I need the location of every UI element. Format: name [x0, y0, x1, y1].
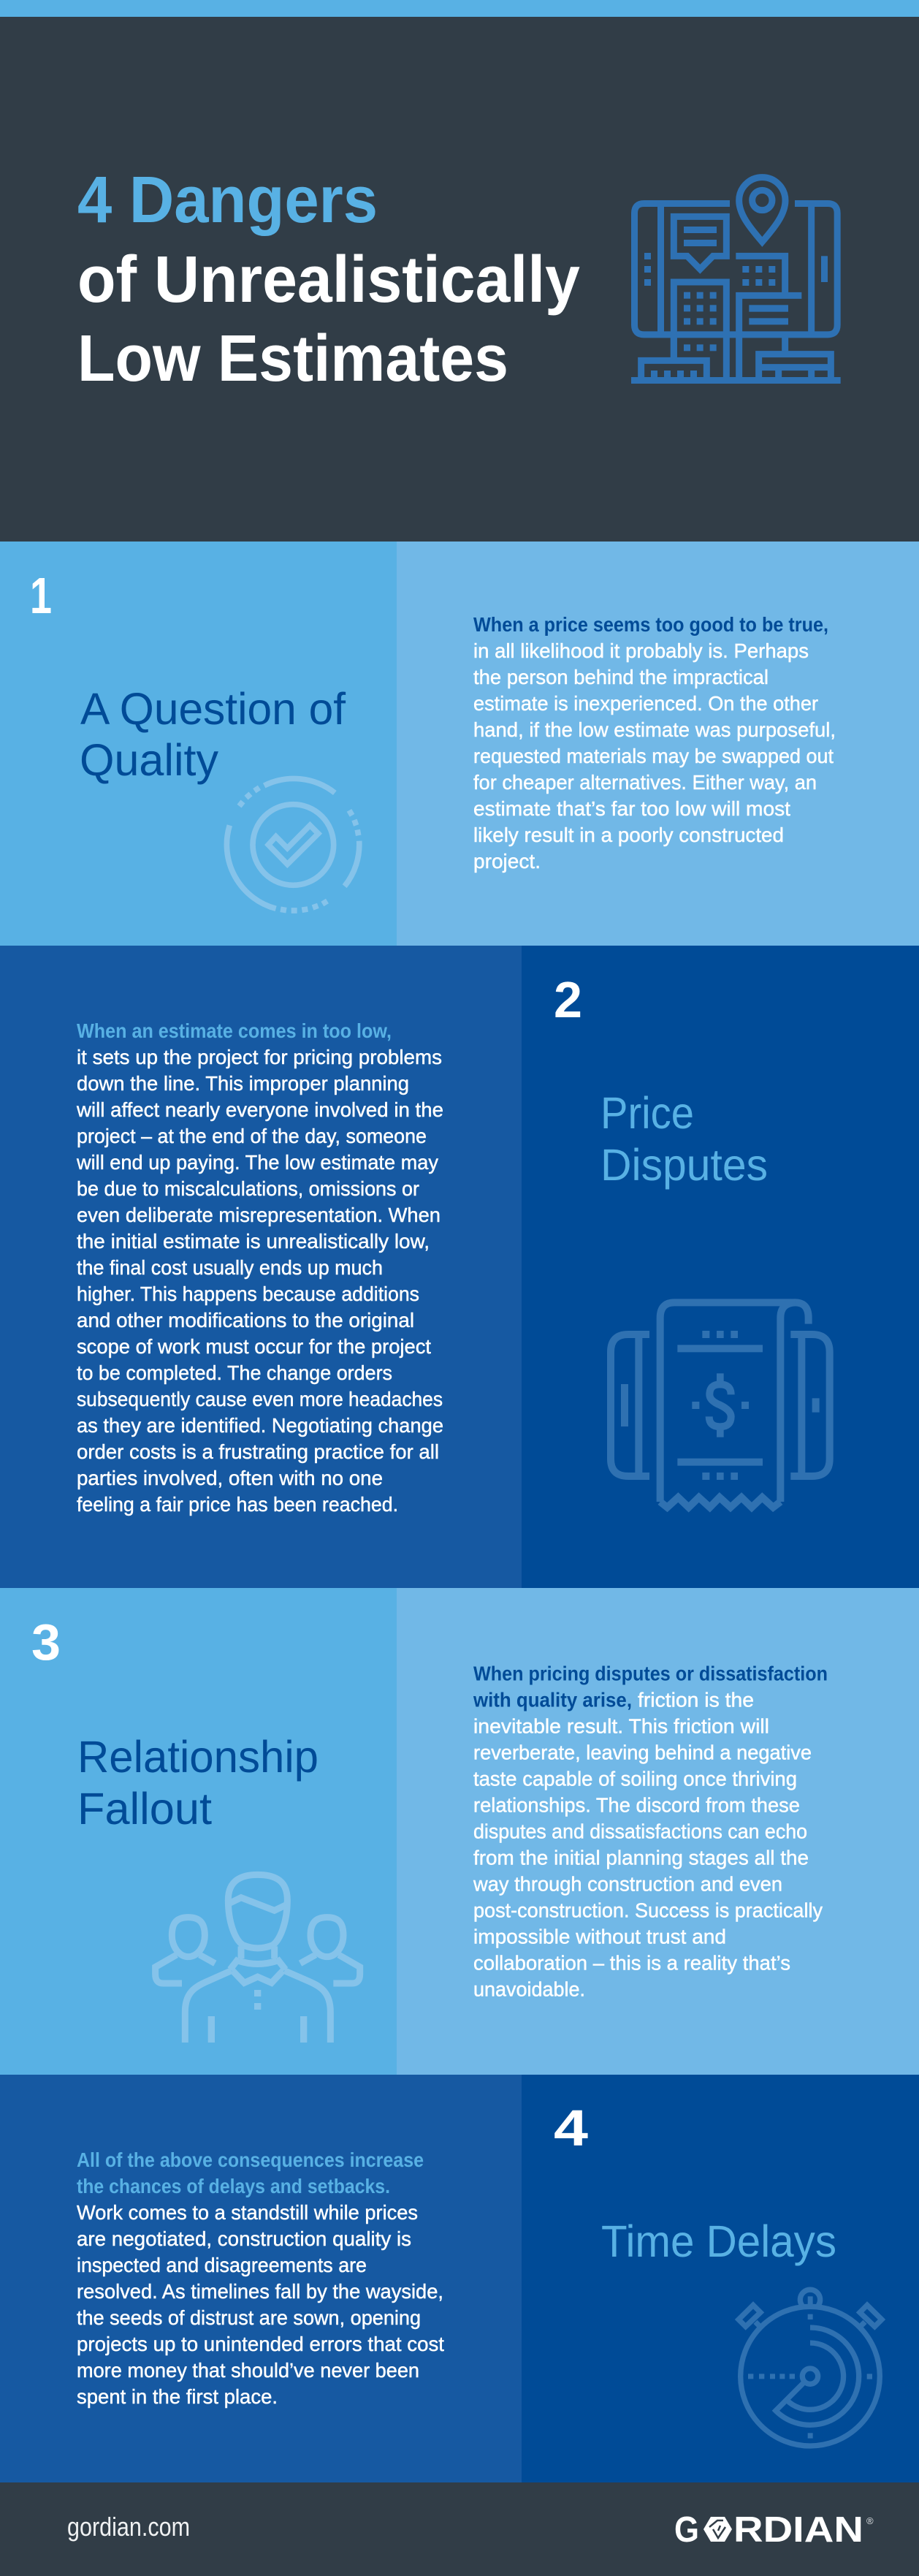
heading: Price Disputes: Price: [600, 1088, 694, 1138]
text block: section 4 body: [77, 2148, 444, 2408]
text block: section 3 body: inevitable result. This friction will: [473, 1714, 769, 1738]
heading: Relationship Fallout: Fallout: [77, 1784, 212, 1834]
text block: section 3 body: disputes and dissatisfactions can echo: [473, 1820, 807, 1843]
icon: team of three people: [156, 1874, 360, 2043]
text block: section 3 body: [473, 1662, 828, 2001]
text block: section 1 body: project.: [473, 850, 541, 873]
text block: section 1 body: When a price seems too good to be true,: [473, 613, 828, 636]
heading: Time Delays: Time Delays: [601, 2216, 836, 2266]
heading: A Question of Quality: [80, 684, 346, 785]
text block: section 1 body: likely result in a poorly constructed: [473, 824, 784, 846]
text block: section 4 body: inspected and disagreements are: [77, 2254, 367, 2276]
heading: A Question of Quality: Quality: [80, 735, 218, 785]
text block: section 4 body: the seeds of distrust are sown, opening: [77, 2306, 421, 2329]
top accent bar: [0, 0, 919, 17]
text block: section 1 body: for cheaper alternatives. Either way, an: [473, 771, 817, 794]
text block: section 1 body: in all likelihood it probably is. Perhaps: [473, 639, 809, 662]
text block: section 3 body: from the initial planning stages all the: [473, 1846, 809, 1869]
icon: stopwatch: [739, 2290, 882, 2446]
text block: section 2 body: feeling a fair price has been reached.: [77, 1493, 398, 1516]
heading: Price Disputes: Disputes: [600, 1140, 768, 1190]
text block: section 2 body: be due to miscalculations, omissions or: [77, 1177, 419, 1200]
logo: Gordian: [674, 2510, 874, 2550]
text block: section 2 body: [76, 1019, 443, 1516]
text block: section 2 body: When an estimate comes in too low,: [77, 1019, 392, 1042]
text block: section 2 body: down the line. This improper planning: [77, 1072, 409, 1095]
text block: section 4 body: spent in the first place.: [77, 2385, 278, 2408]
text block: section 1 body: [473, 613, 836, 873]
website address: gordian.com: [67, 2512, 190, 2542]
title: 4 Dangers: [77, 164, 378, 237]
icon: city map on screen with location pin: [631, 178, 841, 384]
text block: section 2 body: order costs is a frustrating practice for all: [77, 1440, 439, 1463]
title: [77, 164, 580, 395]
text block: section 2 body: it sets up the project for pricing problems: [77, 1046, 442, 1068]
text block: section 2 body: parties involved, often with no one: [77, 1467, 383, 1489]
text block: section 3 body: impossible without trust and: [473, 1925, 726, 1948]
footer panel: [0, 2482, 919, 2576]
text block: section 2 body: the initial estimate is unrealistically low,: [77, 1230, 430, 1253]
panel: section 3 Relationship Fallout: [0, 1588, 919, 2075]
text block: section 3 body: with quality arise,: [473, 1688, 632, 1711]
text block: section 2 body: even deliberate misrepresentation. When: [77, 1204, 441, 1226]
heading: Price Disputes: [600, 1088, 768, 1190]
number 2: 2: [554, 971, 582, 1028]
number 4: 4: [554, 2100, 588, 2157]
text block: section 4 body: Work comes to a standstill while prices: [77, 2201, 418, 2224]
text block: section 1 body: hand, if the low estimate was purposeful,: [473, 718, 836, 741]
text block: section 4 body: projects up to unintended errors that cost: [77, 2333, 444, 2355]
text block: section 3 body: friction is the: [638, 1688, 754, 1711]
text block: section 3 body: unavoidable.: [473, 1977, 585, 2001]
text block: section 3 body: post-construction. Success is practically: [473, 1899, 823, 1922]
header panel: [0, 0, 919, 542]
text block: section 2 body: and other modifications to the original: [77, 1309, 414, 1331]
icon: check mark badge: [226, 778, 359, 911]
text block: section 2 body: to be completed. The change orders: [77, 1361, 392, 1384]
text block: section 4 body: more money that should’ve never been: [77, 2359, 419, 2382]
text block: section 2 body: will end up paying. The low estimate may: [76, 1151, 438, 1174]
text block: section 3 body: taste capable of soiling once thriving: [473, 1767, 797, 1790]
text block: section 3 body: collaboration – this is a reality that’s: [473, 1951, 790, 1975]
text block: section 3 body: relationships. The discord from these: [473, 1793, 800, 1817]
text block: section 3 body: reverberate, leaving behind a negative: [473, 1741, 812, 1764]
text block: section 1 body: the person behind the impractical: [473, 666, 769, 688]
text block: section 2 body: project – at the end of the day, someone: [77, 1125, 427, 1147]
text block: section 1 body: estimate is inexperienced. On the other: [473, 692, 818, 715]
text block: section 4 body: resolved. As timelines fall by the wayside,: [77, 2280, 443, 2303]
text block: section 3 body: When pricing disputes or dissatisfaction: [473, 1662, 828, 1685]
text block: section 1 body: estimate that’s far too low will most: [473, 797, 790, 820]
text block: section 2 body: scope of work must occur for the project: [77, 1335, 431, 1358]
logo: Gordian: ®: [866, 2515, 874, 2526]
text block: section 2 body: subsequently cause even more headaches: [77, 1388, 443, 1410]
heading: Relationship Fallout: [77, 1732, 319, 1834]
text block: section 1 body: requested materials may be swapped out: [473, 745, 834, 767]
icon: logo emblem: [703, 2517, 732, 2542]
text block: section 4 body: the chances of delays and setbacks.: [77, 2175, 390, 2197]
panel: section 1 A Question of Quality: [0, 542, 919, 946]
panel: section 2 Price Disputes: [0, 946, 919, 1588]
title: Low Estimates: [77, 322, 508, 395]
text block: section 4 body: are negotiated, construction quality is: [77, 2227, 411, 2250]
text block: section 3 body: way through construction and even: [473, 1872, 782, 1896]
heading: Relationship Fallout: Relationship: [77, 1732, 319, 1782]
text block: section 2 body: higher. This happens because additions: [77, 1283, 419, 1305]
text block: section 2 body: the final cost usually ends up much: [77, 1256, 383, 1279]
heading: A Question of Quality: A Question of: [80, 684, 346, 734]
title: of Unrealistically: [77, 243, 580, 316]
number 1: 1: [30, 567, 52, 624]
logo: Gordian: RDIAN: [733, 2510, 863, 2550]
text block: section 4 body: All of the above consequences increase: [77, 2148, 424, 2171]
text block: section 2 body: as they are identified. Negotiating change: [77, 1414, 443, 1437]
panel: section 4 Time Delays: [0, 2075, 919, 2482]
icon: receipt with dollar sign: [611, 1302, 830, 1508]
number 3: 3: [31, 1614, 61, 1671]
logo: Gordian: G: [674, 2510, 699, 2550]
text block: section 2 body: will affect nearly everyone involved in the: [76, 1098, 443, 1121]
